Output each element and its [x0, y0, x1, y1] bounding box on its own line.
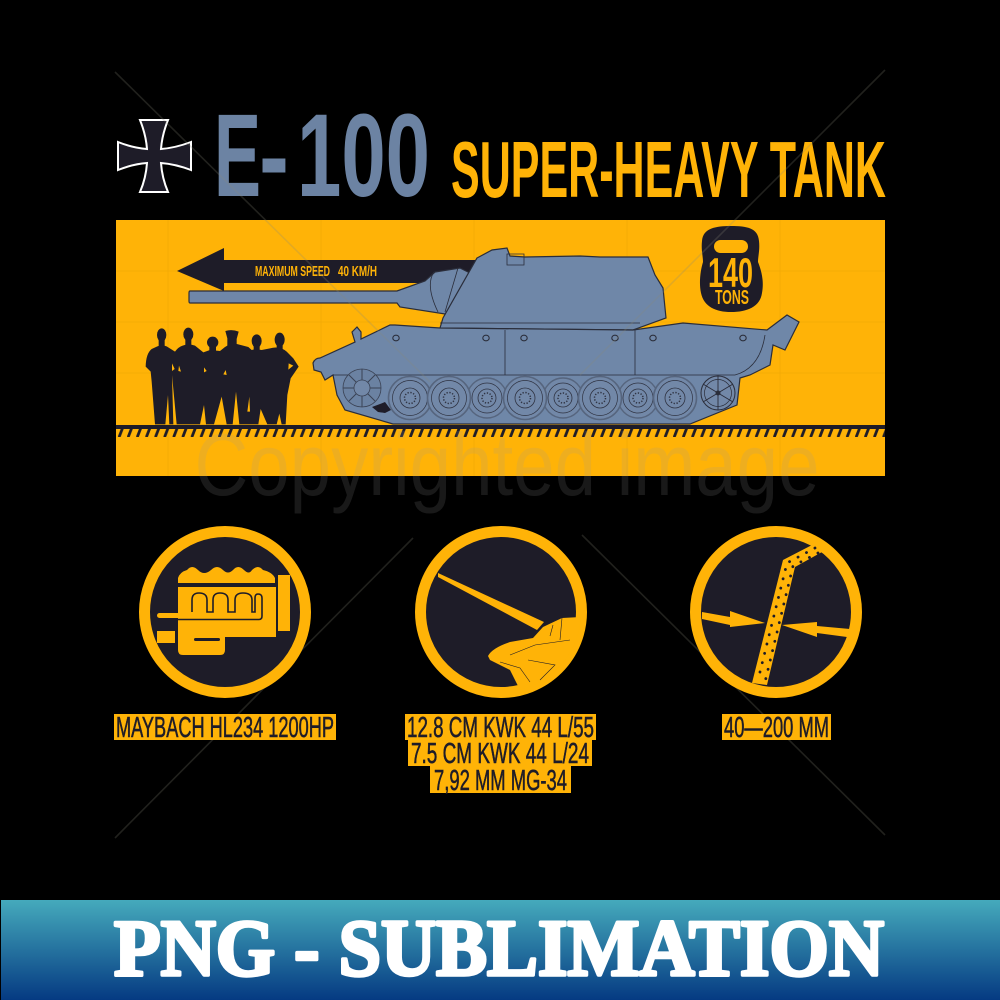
- weight icon: 140 tons: TONS: [715, 287, 749, 309]
- turret: [440, 248, 666, 330]
- title: E-100: 100: [297, 90, 430, 222]
- label: armament: 12.8 CM KWK 44 L/55: [407, 712, 594, 744]
- arrow: maximum speed: [177, 248, 480, 291]
- speed label: MAXIMUM SPEED: [255, 264, 330, 280]
- speed label: 40 KM/H: [338, 264, 377, 280]
- mantlet detail: [430, 254, 640, 323]
- arrow: right: [782, 622, 850, 637]
- tank: [189, 248, 799, 424]
- engine circle: [144, 532, 306, 692]
- idler wheel: [701, 376, 735, 410]
- arrow: left: [702, 611, 765, 627]
- ground line: [116, 425, 885, 437]
- weight icon: 140 tons: 140: [708, 249, 753, 296]
- banner: [1, 900, 1000, 1000]
- engine icon: [157, 567, 290, 655]
- label: engine: [114, 712, 336, 744]
- title: E-100: -: [259, 90, 289, 222]
- armor circle: [696, 532, 856, 692]
- hull: [313, 315, 799, 424]
- panel: armor: [696, 532, 856, 692]
- panel: armament: [420, 532, 600, 700]
- label: armor: [722, 712, 831, 744]
- label: armor: 40—200 MM: [724, 712, 829, 744]
- watermark lines: [115, 70, 885, 838]
- title: E-100: E: [214, 90, 261, 222]
- banner text: PNG - SUBLIMATION: [114, 905, 884, 993]
- drive sprocket: [343, 369, 381, 407]
- road wheels: [388, 376, 696, 420]
- label: engine: MAYBACH HL234 1200HP: [116, 712, 334, 744]
- panel: tank side view: [116, 220, 885, 476]
- gun and tank icon: [438, 573, 576, 686]
- title: cross emblem: [118, 120, 191, 192]
- crew silhouettes: [146, 328, 299, 424]
- label: armament: 7.5 CM KWK 44 L/24: [411, 738, 589, 770]
- panel: engine: [144, 532, 306, 692]
- armament circle: [420, 532, 582, 692]
- hull bolts: [393, 335, 746, 341]
- label: armament: [405, 712, 596, 797]
- gun barrel: [189, 268, 470, 314]
- title: E-100: [214, 90, 430, 222]
- label: armament: 7,92 MM MG-34: [434, 765, 567, 797]
- weight icon: 140 tons: [700, 226, 763, 312]
- armor plate icon: [752, 545, 822, 685]
- watermark text: Copyrighted image: [194, 415, 820, 514]
- mud detail: [372, 402, 391, 413]
- hull panel lines: [333, 330, 765, 375]
